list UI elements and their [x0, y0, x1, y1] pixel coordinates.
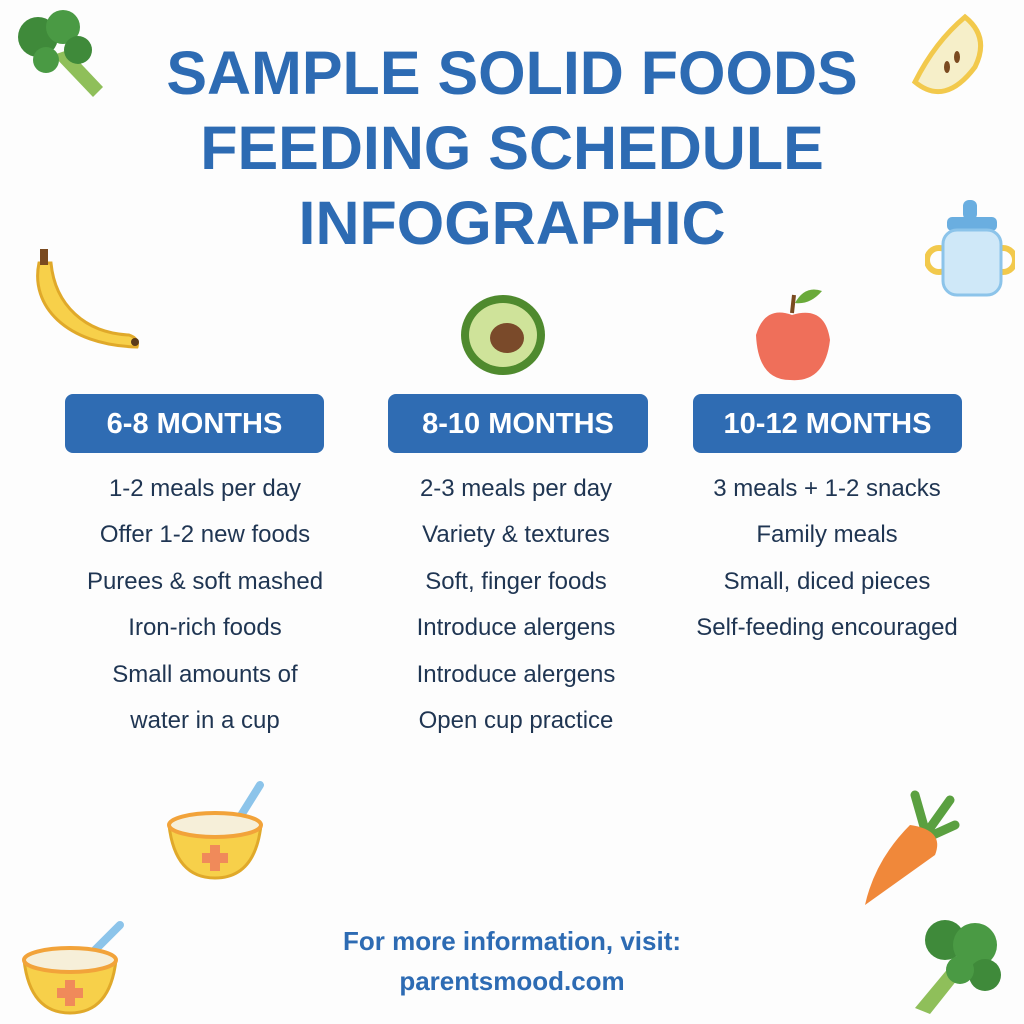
pill: 10-12 months [693, 394, 962, 453]
list: 6-8 months: 1-2 meals per day [109, 475, 301, 502]
icon: apple [756, 290, 830, 380]
footer line 1: For more information, visit: [343, 926, 681, 956]
list: 8-10 months: Introduce alergens [417, 661, 615, 688]
list: 8-10 months: Introduce alergens [417, 614, 615, 641]
title: FEEDING SCHEDULE [200, 114, 824, 182]
icon: avocado [461, 295, 545, 375]
footer line 2: parentsmood.com [399, 966, 625, 996]
icon: carrot [865, 790, 960, 905]
list: 8-10 months: Variety & textures [422, 521, 610, 548]
icon: banana [36, 249, 139, 348]
list: 6-8 months: Iron-rich foods [128, 614, 282, 641]
pill: 8-10 months: 8-10 MONTHS [422, 408, 614, 440]
title: SAMPLE SOLID FOODS [166, 39, 858, 107]
pill: 10-12 months: 10-12 MONTHS [724, 408, 931, 440]
footer [343, 926, 681, 996]
list: 6-8 months [87, 475, 323, 734]
list: 10-12 months: Family meals [756, 521, 898, 548]
list: 6-8 months: Small amounts of [112, 661, 298, 688]
list: 10-12 months [696, 475, 958, 641]
list: 8-10 months: 2-3 meals per day [420, 475, 612, 502]
icon: sippy cup [925, 200, 1015, 296]
pill: 8-10 months [388, 394, 648, 453]
icon: broccoli bottom-right [915, 920, 1001, 1014]
list: 10-12 months: Small, diced pieces [724, 568, 930, 595]
title: INFOGRAPHIC [298, 189, 726, 257]
pill: 6-8 months: 6-8 MONTHS [107, 408, 282, 440]
pill: 6-8 months [65, 394, 324, 453]
list: 10-12 months: Self-feeding encouraged [696, 614, 958, 641]
list: 6-8 months: Offer 1-2 new foods [100, 521, 310, 548]
icon: bowl bottom-left [22, 921, 124, 1014]
list: 8-10 months [417, 475, 615, 734]
list: 6-8 months: Purees & soft mashed [87, 568, 323, 595]
title [166, 39, 858, 257]
list: 10-12 months: 3 meals + 1-2 snacks [713, 475, 941, 502]
icon: bowl middle [167, 781, 264, 880]
list: 8-10 months: Soft, finger foods [425, 568, 607, 595]
list: 6-8 months: water in a cup [130, 707, 280, 734]
icon: broccoli top-left [18, 10, 103, 97]
list: 8-10 months: Open cup practice [419, 707, 613, 734]
icon: apple slice [912, 14, 984, 94]
